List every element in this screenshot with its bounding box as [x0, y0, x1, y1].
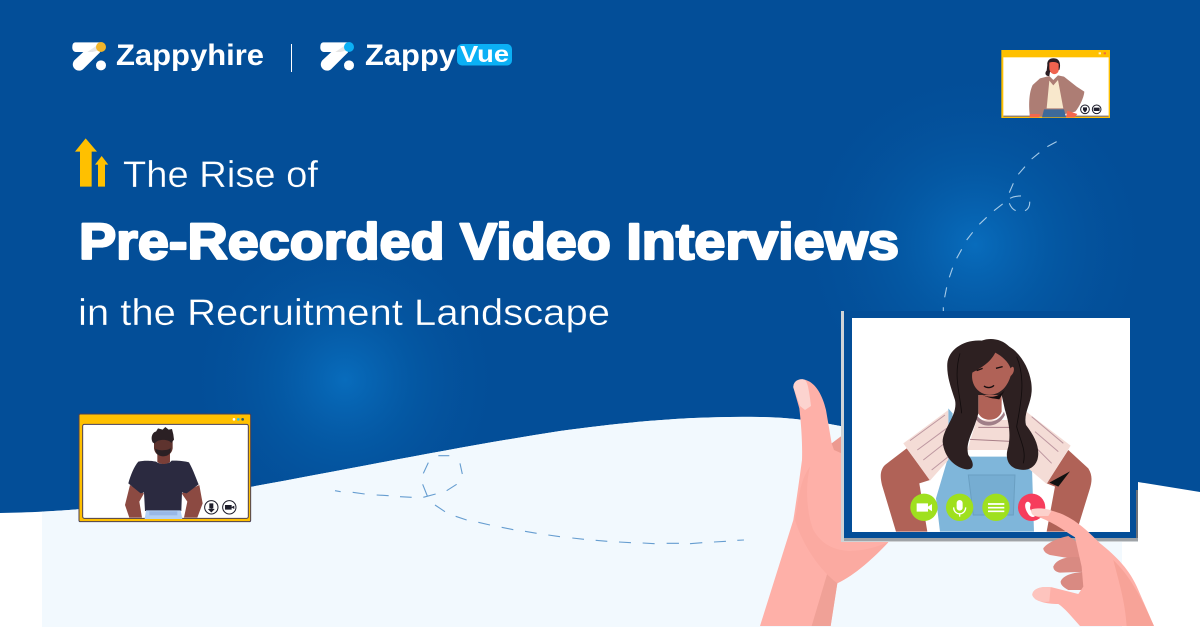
wave: white base with pale panel — [0, 400, 1200, 628]
right hand tapping — [1031, 508, 1154, 626]
woman: top — [1047, 80, 1063, 108]
arms — [881, 448, 930, 532]
logo: ZappyVue — [320, 39, 512, 72]
title line 1: The Rise of — [123, 154, 319, 195]
logo: ZappyVue: Vue — [460, 41, 509, 67]
dashed path: lower — [335, 456, 744, 544]
man: jeans — [145, 510, 182, 519]
woman: jacket — [1029, 75, 1084, 117]
left hand holding tablet — [760, 379, 888, 626]
neck — [978, 390, 1002, 420]
video window: woman in jacket — [1001, 50, 1110, 118]
hair — [943, 339, 1038, 470]
logo: ZappyVue: Zappy — [365, 39, 456, 72]
woman: hair — [1045, 58, 1060, 76]
face — [972, 353, 1014, 395]
tablet — [841, 311, 1138, 542]
woman: mic and camera buttons — [1081, 105, 1089, 114]
title line 2: Pre-Recorded Video Interviews — [79, 213, 899, 270]
video window: man — [79, 414, 251, 522]
woman: face — [1049, 62, 1059, 74]
title line 3: in the Recruitment Landscape — [78, 292, 610, 333]
call buttons — [910, 494, 938, 521]
man: shirt — [128, 461, 199, 511]
logo: Zappyhire: Zappyhire — [116, 39, 264, 72]
woman: jeans and hand — [1042, 109, 1066, 117]
man: neck and head — [157, 450, 170, 464]
man: mic and camera buttons — [205, 501, 218, 514]
icon: rising arrows — [75, 138, 108, 187]
dashed path: upper right — [943, 142, 1057, 317]
shirt — [967, 420, 1013, 450]
overalls — [936, 408, 1034, 532]
man: arms — [125, 485, 203, 518]
logo divider — [291, 44, 292, 72]
woman on screen — [881, 339, 1092, 532]
